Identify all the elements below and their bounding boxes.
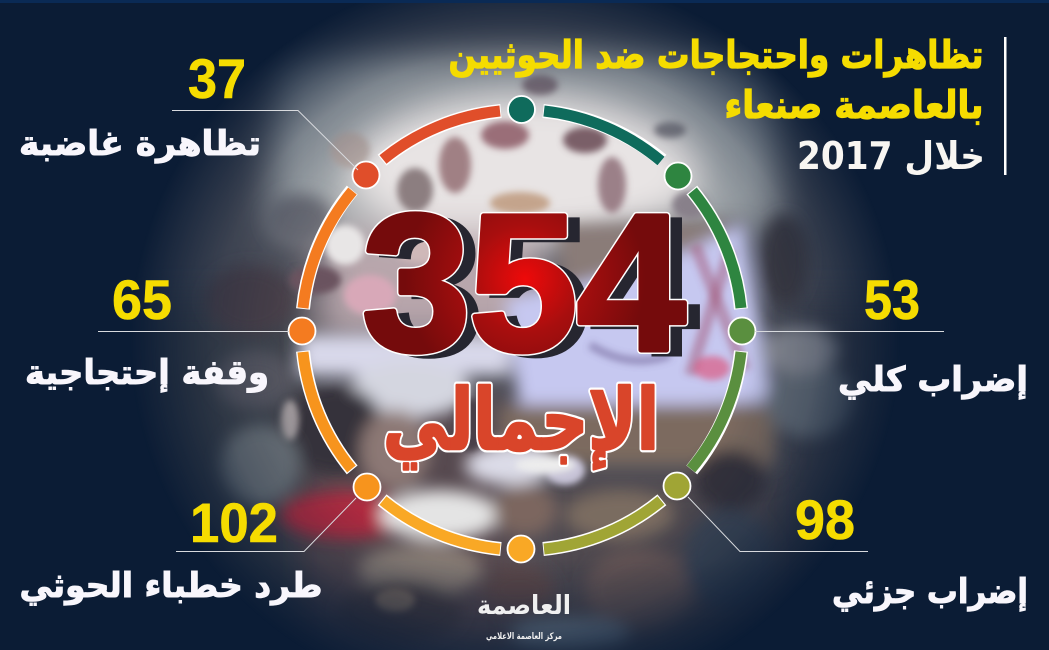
- title block: [448, 33, 1006, 178]
- stat: 37: تظاهرة غاضبة: [19, 124, 261, 164]
- total label: الإجمالي: [383, 371, 659, 470]
- total number 354: 354: [362, 174, 685, 392]
- total number 354: 354: [375, 178, 698, 396]
- stat: 98: [688, 488, 1028, 612]
- stat: 65: 65: [112, 268, 172, 331]
- stat: 53: 53: [864, 268, 920, 331]
- stat: 102: 102: [190, 491, 278, 554]
- title block: خلال 2017: [797, 134, 985, 178]
- stat: 53: إضراب كلي: [838, 360, 1028, 400]
- stat: 102: طرد خطباء الحوثي: [20, 566, 322, 606]
- top edge band: [0, 0, 1049, 3]
- logo: Al-Asimah media center: العاصمة: [477, 591, 571, 621]
- background: blurred protest photo: [149, 3, 881, 650]
- logo: Al-Asimah media center: [477, 591, 571, 642]
- total label: الإجمالي: [383, 371, 659, 470]
- stat: 65: [25, 268, 289, 393]
- stat: 37: 37: [188, 47, 246, 110]
- stat: 102: [20, 491, 356, 606]
- logo: Al-Asimah media center: مركز العاصمة الاعلامي: [486, 632, 562, 642]
- title block: بالعاصمة صنعاء: [724, 83, 984, 127]
- stat: 65: وقفة إحتجاجية: [25, 353, 269, 393]
- stat: 53: [755, 268, 1028, 400]
- ring: segmented circle with nodes: [288, 96, 756, 562]
- stat: 98: إضراب جزئي: [832, 572, 1028, 612]
- total number 354: 354: [362, 174, 685, 392]
- stat: 37: [19, 47, 358, 170]
- stat: 98: 98: [795, 488, 855, 551]
